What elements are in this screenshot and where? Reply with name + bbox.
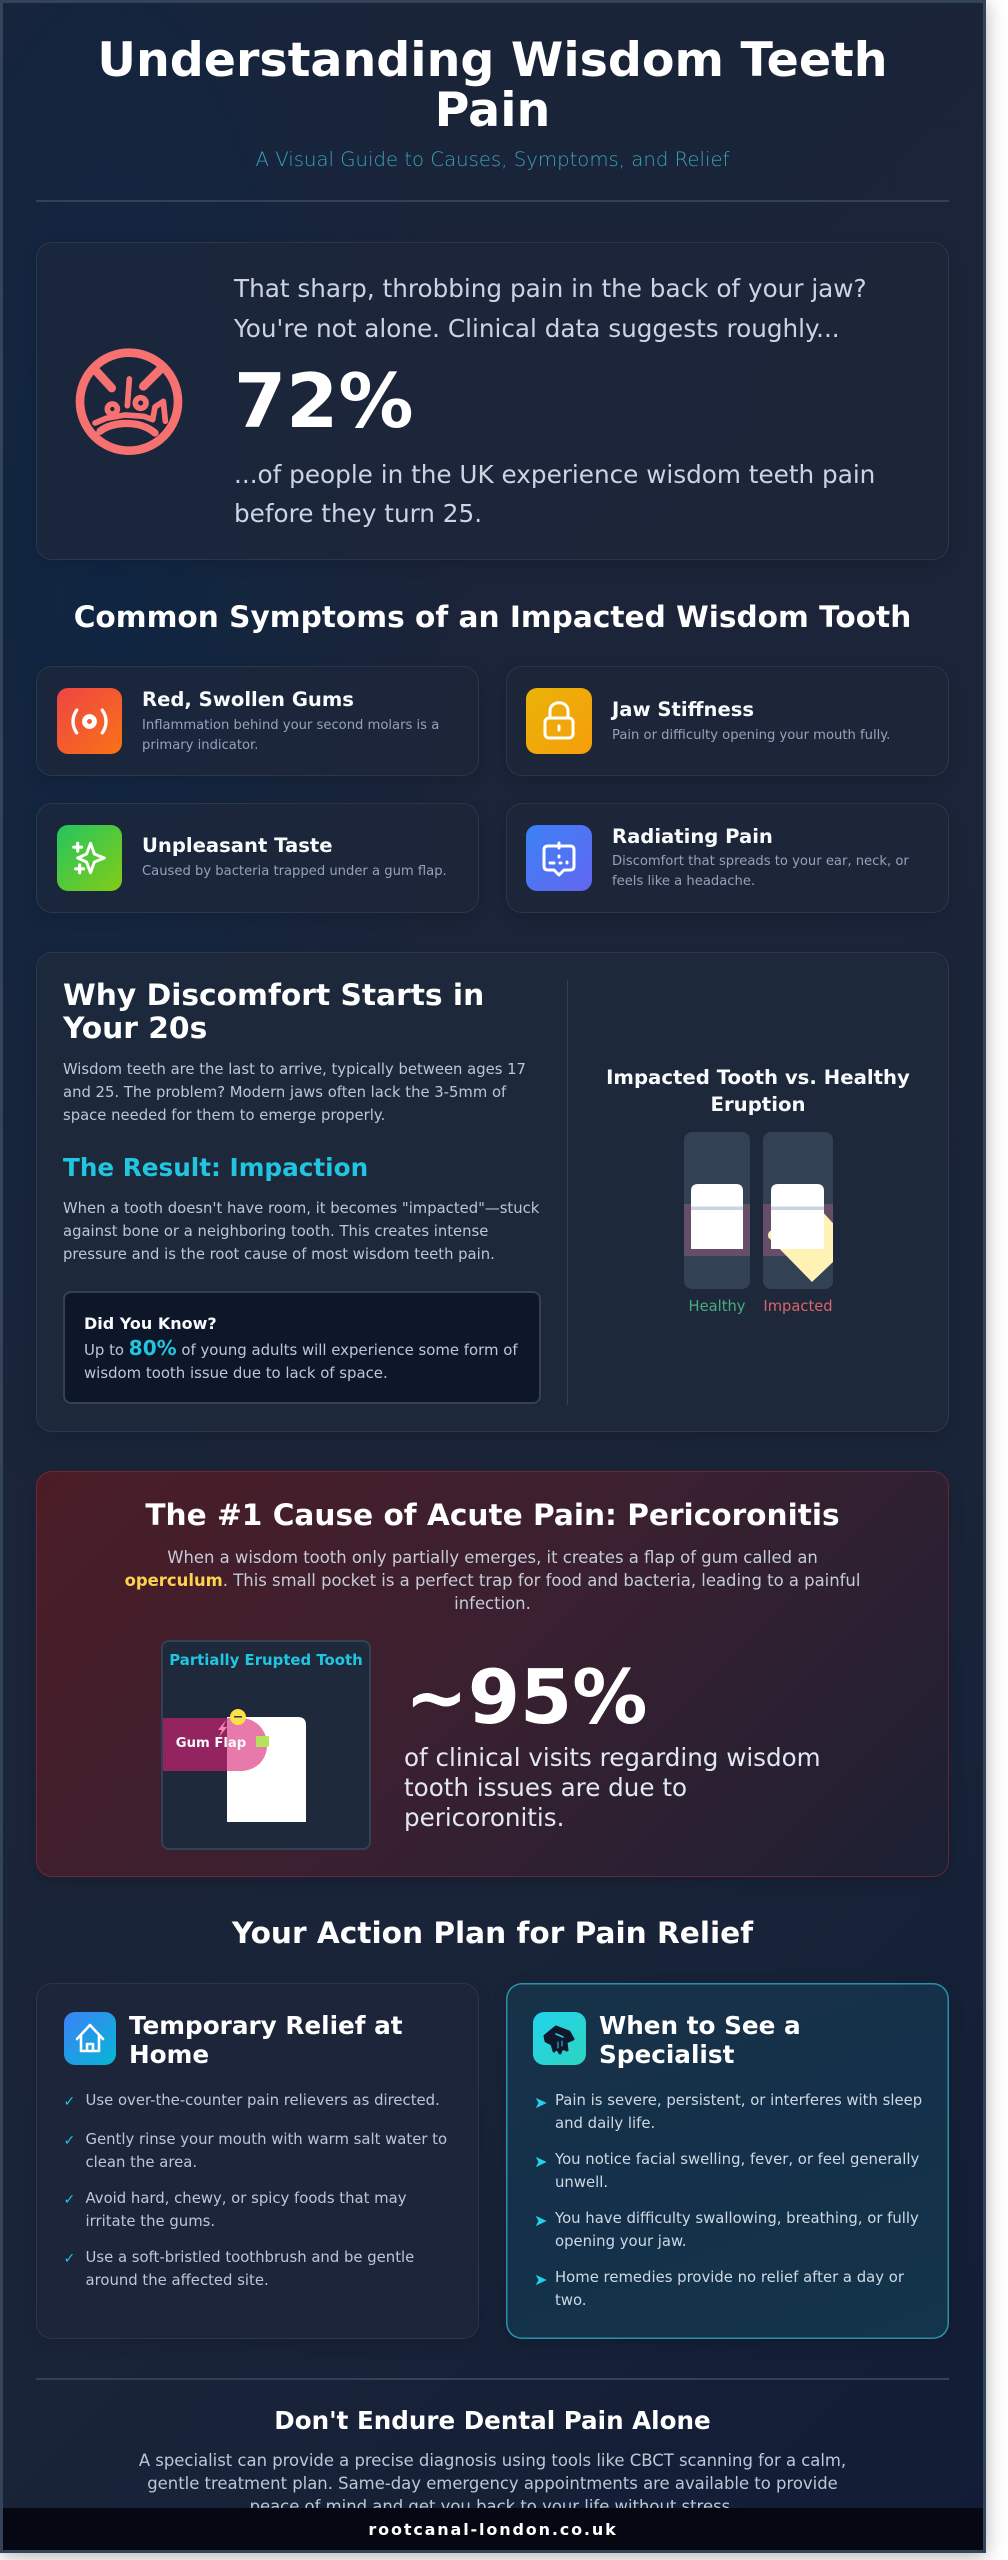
callout: did you know [63, 1291, 541, 1404]
warning list [534, 2091, 922, 2309]
icon: pained face in circle [76, 348, 182, 455]
item: around the affected site. [86, 2271, 269, 2289]
diagram: partially erupted tooth [161, 1640, 371, 1850]
heading: The #1 Cause of Acute Pain: Pericoronitis [145, 1498, 840, 1532]
item [64, 2248, 414, 2289]
paragraph [63, 1061, 526, 1124]
paragraph: When a wisdom tooth only partially emerges, it creates a flap of gum called an [167, 1548, 818, 1567]
icon: house [64, 2012, 116, 2065]
paragraph: Wisdom teeth are the last to arrive, typically between ages 17 [63, 1061, 526, 1078]
card title: Jaw Stiffness [612, 698, 754, 721]
intro text [234, 274, 867, 343]
paragraph: and 25. The problem? Modern jaws often lack the 3-5mm of [63, 1084, 506, 1101]
item: You have difficulty swallowing, breathing, or fully [555, 2209, 919, 2227]
card: radiating pain [506, 803, 949, 913]
label: gum flap: Gum Flap [176, 1736, 246, 1751]
card description: Pain or difficulty opening your mouth fully. [612, 728, 890, 743]
item [64, 2130, 447, 2171]
item [534, 2209, 919, 2250]
panel: temporary relief at home [36, 1983, 479, 2339]
heading: Your 20s [63, 1011, 207, 1046]
item: Avoid hard, chewy, or spicy foods that may [86, 2189, 406, 2207]
card title: Unpleasant Taste [142, 834, 333, 857]
card description: Inflammation behind your second molars is a [142, 718, 439, 733]
website: rootcanal-london.co.uk [368, 2520, 618, 2539]
paragraph: against bone or a neighboring tooth. This creates intense [63, 1223, 488, 1240]
checklist [64, 2091, 447, 2289]
panel: hero statistic [36, 242, 949, 560]
card: jaw stiffness [506, 666, 949, 776]
checklist: ✓ [64, 2251, 75, 2267]
item: opening your jaw. [555, 2232, 687, 2250]
paragraph: space needed for them to emerge properly. [63, 1107, 385, 1124]
panel: why discomfort starts [36, 952, 949, 1432]
card description: Caused by bacteria trapped under a gum flap. [142, 864, 447, 879]
icon: vibration [57, 688, 122, 754]
item: clean the area. [86, 2153, 197, 2171]
warning list: ➤ [534, 2093, 547, 2112]
paragraph [63, 1200, 540, 1263]
intro text: You're not alone. Clinical data suggests roughly... [234, 314, 840, 343]
checklist: ✓ [64, 2133, 75, 2149]
paragraph: When a tooth doesn't have room, it becomes "impacted"—stuck [63, 1200, 539, 1217]
title [97, 33, 888, 138]
item [534, 2268, 904, 2309]
panel heading [129, 2011, 403, 2069]
diagram heading: Impacted Tooth vs. Healthy [606, 1066, 910, 1089]
diagram heading: Eruption [711, 1093, 805, 1116]
icon: message with dots [526, 825, 592, 891]
statistic caption: before they turn 25. [234, 499, 482, 528]
paragraph [125, 1548, 860, 1613]
panel heading: When to See a [599, 2011, 801, 2040]
footer bar [3, 2508, 983, 2550]
icon: lock [526, 688, 592, 754]
diagram title: Partially Erupted Tooth [169, 1651, 363, 1669]
item: Use a soft-bristled toothbrush and be gentle [86, 2248, 414, 2266]
card title: Red, Swollen Gums [142, 688, 354, 711]
intro text: That sharp, throbbing pain in the back of your jaw? [234, 274, 867, 303]
statistic caption: pericoronitis. [404, 1803, 564, 1832]
item: two. [555, 2291, 586, 2309]
label: impacted: Impacted [763, 1298, 833, 1315]
card description: primary indicator. [142, 738, 258, 753]
tooth and gum flap [163, 1709, 306, 1822]
statistic caption: of clinical visits regarding wisdom [404, 1743, 821, 1772]
panel: pericoronitis [36, 1471, 949, 1877]
panel: when to see a specialist [506, 1983, 949, 2339]
icon: specialist [533, 2012, 586, 2065]
callout: did you know: Up to 80% of young adults will experience some form of [84, 1336, 518, 1360]
title: Pain [435, 83, 550, 138]
item: unwell. [555, 2173, 608, 2191]
callout: did you know: wisdom tooth issue due to lack of space. [84, 1364, 388, 1382]
label: healthy: Healthy [689, 1298, 745, 1315]
warning list: ➤ [534, 2152, 547, 2171]
statistic 95%: ~95% [405, 1653, 647, 1741]
item: Use over-the-counter pain relievers as directed. [86, 2091, 440, 2109]
subtitle: A Visual Guide to Causes, Symptoms, and Relief [255, 148, 730, 171]
card: red swollen gums [36, 666, 479, 776]
heading: common symptoms: Common Symptoms of an Impacted Wisdom Tooth [74, 600, 911, 634]
heading: closing: Don't Endure Dental Pain Alone [274, 2406, 711, 2435]
heading: action plan: Your Action Plan for Pain Relief [232, 1916, 753, 1950]
item [534, 2150, 919, 2191]
icon: sparkle [57, 825, 122, 891]
checklist: ✓ [64, 2094, 75, 2110]
item: Gently rinse your mouth with warm salt water to [86, 2130, 447, 2148]
closing paragraph: peace of mind and get you back to your life without stress. [250, 2497, 735, 2516]
item: irritate the gums. [86, 2212, 215, 2230]
item [64, 2189, 406, 2230]
impacted tooth [763, 1132, 833, 1289]
panel heading: Home [129, 2040, 209, 2069]
subheading: The Result: Impaction [63, 1153, 368, 1182]
diagram heading [606, 1066, 910, 1116]
item: Pain is severe, persistent, or interferes with sleep [555, 2091, 922, 2109]
warning list: ➤ [534, 2211, 547, 2230]
item: You notice facial swelling, fever, or feel generally [555, 2150, 919, 2168]
callout: did you know: Did You Know? [84, 1314, 217, 1333]
panel heading: Temporary Relief at [129, 2011, 403, 2040]
statistic 72%: 72% [234, 357, 414, 445]
title: Understanding Wisdom Teeth [97, 33, 888, 88]
card title: Radiating Pain [612, 825, 773, 848]
paragraph: infection. [454, 1594, 531, 1613]
closing paragraph: A specialist can provide a precise diagnosis using tools like CBCT scanning for a calm, [139, 2451, 846, 2470]
warning list: ➤ [534, 2270, 547, 2289]
paragraph: pressure and is the root cause of most wisdom teeth pain. [63, 1246, 495, 1263]
diagram: healthy vs impacted [684, 1132, 833, 1289]
closing paragraph [139, 2451, 846, 2516]
checklist: ✓ [64, 2192, 75, 2208]
item: Home remedies provide no relief after a day or [555, 2268, 904, 2286]
statistic caption [234, 460, 875, 528]
panel heading [599, 2011, 801, 2069]
card description: feels like a headache. [612, 874, 755, 889]
panel heading: Specialist [599, 2040, 734, 2069]
statistic caption [404, 1743, 821, 1832]
item [534, 2091, 922, 2132]
closing paragraph: gentle treatment plan. Same-day emergency appointments are available to provide [147, 2474, 838, 2493]
paragraph: operculum. This small pocket is a perfect trap for food and bacteria, leading to a painful [125, 1571, 860, 1590]
heading: Why Discomfort Starts in [63, 978, 484, 1013]
card: unpleasant taste [36, 803, 479, 913]
card description: Discomfort that spreads to your ear, neck, or [612, 854, 909, 869]
item: and daily life. [555, 2114, 655, 2132]
heading [62, 978, 484, 1046]
statistic caption: ...of people in the UK experience wisdom teeth pain [234, 460, 875, 489]
statistic caption: tooth issues are due to [404, 1773, 687, 1802]
card description [612, 854, 909, 889]
healthy tooth [684, 1132, 750, 1289]
card description [142, 718, 439, 753]
